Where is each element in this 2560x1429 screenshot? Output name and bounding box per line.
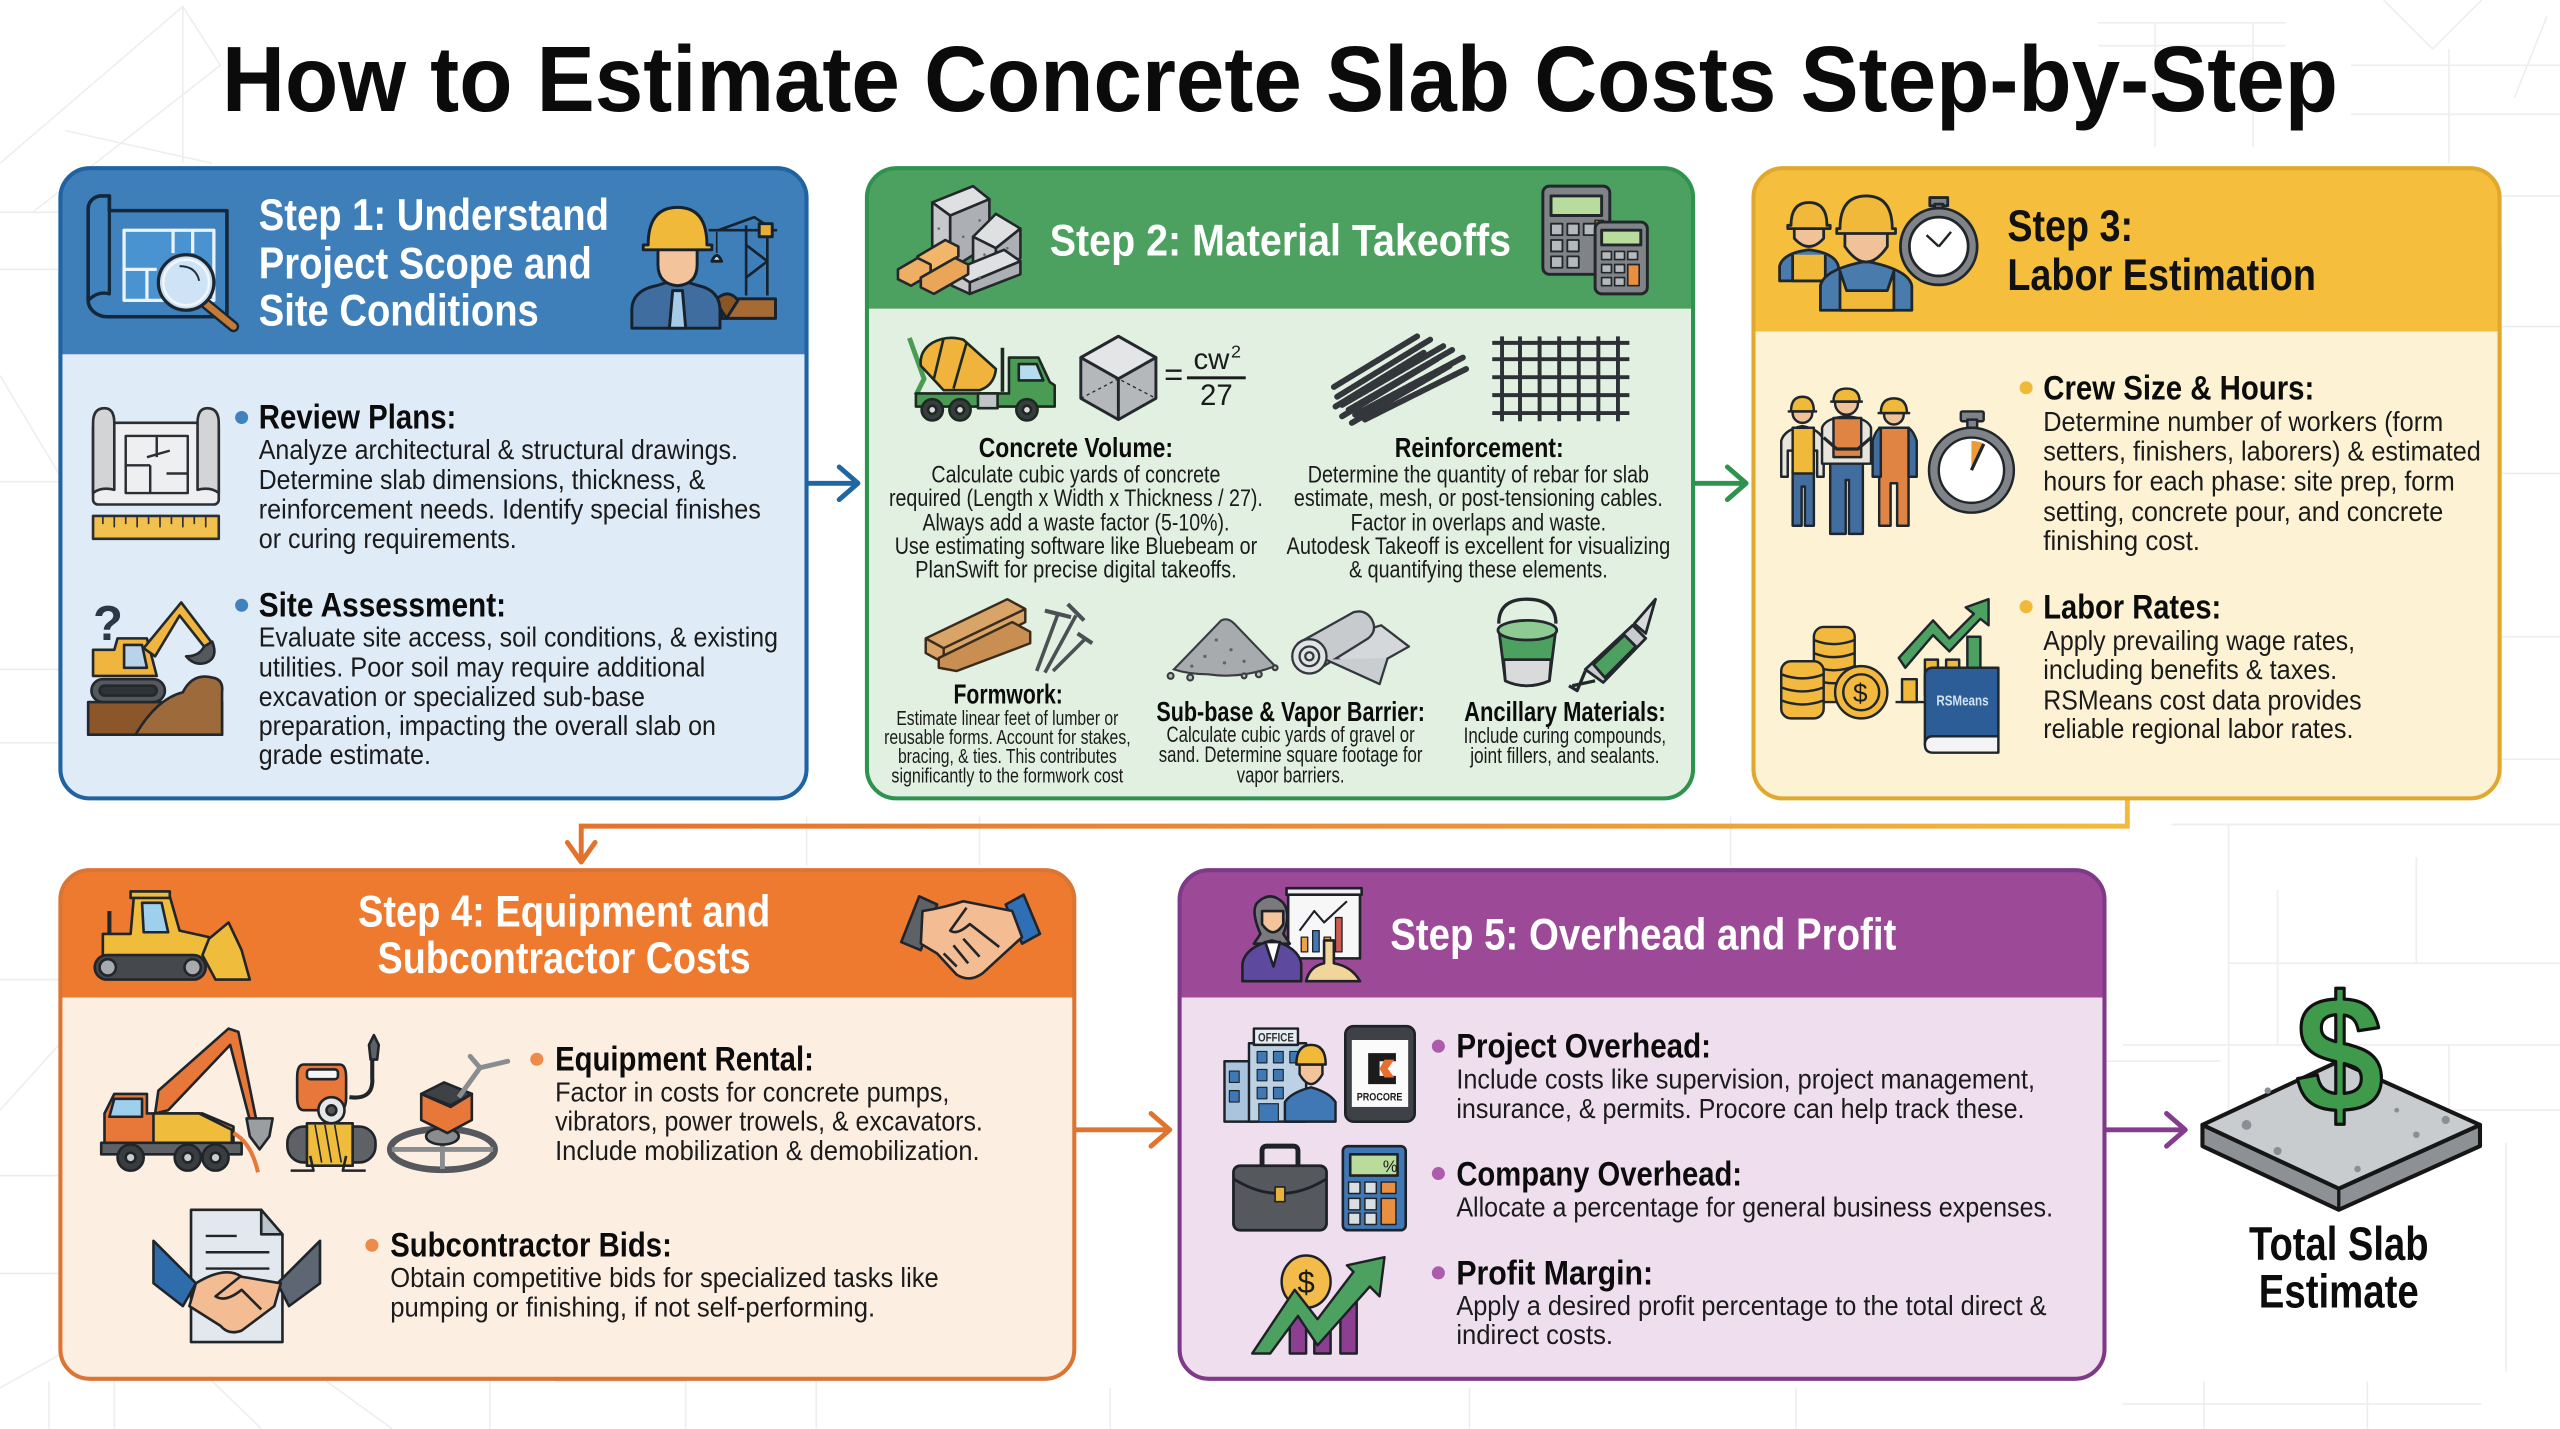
icon: curing bucket: [1498, 599, 1557, 686]
text: ancillary materials: [1464, 723, 1666, 768]
icon: bulldozer: [95, 891, 250, 980]
icon: lumber and nails: [926, 599, 1092, 673]
panel: step 3: [1753, 168, 2500, 798]
subheading: concrete volume: Concrete Volume:: [979, 432, 1173, 463]
icon: power trowel: [390, 1056, 508, 1170]
icon: vapor barrier roll: [1292, 611, 1409, 684]
text: review plans: or curing requirements.: [259, 523, 517, 554]
panel: step 1: [60, 168, 807, 798]
subheading: review plans: Review Plans:: [259, 399, 456, 437]
text: crew size and hours: hours for each phase: site prep, form: [2043, 466, 2455, 497]
text: sub-base and vapor barrier: sand. Determine square footage for: [1159, 742, 1422, 767]
heading: step 1: Site Conditions: [259, 287, 539, 336]
arrow: step 2 to step 3: [1693, 467, 1746, 500]
text: reinforcement: Determine the quantity of rebar for slab: [1308, 461, 1649, 488]
text: labor rates: [2043, 625, 2362, 744]
text: site assessment: [259, 622, 778, 770]
block: labor rates: [1781, 588, 2362, 753]
text: equipment rental: Include mobilization & demobilization.: [555, 1135, 980, 1166]
text: concrete volume: Use estimating software like Bluebeam or: [895, 533, 1257, 560]
block: reinforcement: [1287, 336, 1670, 583]
icon: profit chart: $: [1297, 1265, 1315, 1300]
text: reinforcement: estimate, mesh, or post-tensioning cables.: [1294, 485, 1663, 512]
heading: step 5: Step 5: Overhead and Profit: [1390, 910, 1897, 959]
icon: cube formula: 27: [1200, 379, 1233, 412]
title: How to Estimate Concrete Slab Costs Step-by-Step: [222, 27, 2338, 131]
text: profit margin: Apply a desired profit percentage to the total direct &: [1456, 1290, 2047, 1321]
text: crew size and hours: Determine number of workers (form: [2043, 406, 2443, 437]
icon: concrete blocks and lumber: [898, 186, 1020, 294]
bullet: [2020, 381, 2033, 394]
text: labor rates: RSMeans cost data provides: [2043, 684, 2362, 715]
icon: excavator on soil: ?: [93, 597, 123, 651]
icon: crew and stopwatch: [1781, 389, 2014, 534]
text: profit margin: [1456, 1290, 2047, 1350]
text: site assessment: preparation, impacting the overall slab on: [259, 710, 716, 741]
text: formwork: [884, 707, 1131, 787]
subheading: labor rates: Labor Rates:: [2043, 588, 2221, 626]
heading: step 4: Subcontractor Costs: [378, 934, 751, 983]
icon: excavator on soil: [88, 597, 222, 735]
text: equipment rental: vibrators, power trowels, & excavators.: [555, 1106, 983, 1137]
icon: concrete slab with dollar sign: $: [2296, 962, 2384, 1148]
text: project overhead: insurance, & permits. Procore can help track these.: [1456, 1093, 2024, 1124]
subheading: ancillary materials: Ancillary Materials:: [1464, 696, 1666, 727]
text: ancillary materials: Include curing compounds,: [1464, 723, 1666, 748]
bullet: [235, 599, 248, 612]
text: review plans: Determine slab dimensions, thickness, &: [259, 464, 706, 495]
icon: tablet with Procore: PROCORE: [1357, 1091, 1403, 1103]
block: subcontractor bids: [153, 1210, 939, 1342]
panel: step 4: [60, 870, 1074, 1379]
block: equipment rental: [101, 1029, 983, 1172]
text: site assessment: excavation or specialized sub-base: [259, 681, 645, 712]
block: ancillary materials: [1464, 599, 1666, 768]
text: profit margin: indirect costs.: [1456, 1319, 1613, 1350]
bullet: [1432, 1167, 1445, 1180]
heading: step 1: Project Scope and: [259, 239, 592, 288]
text: concrete volume: PlanSwift for precise digital takeoffs.: [915, 556, 1237, 583]
icon: excavator truck: [101, 1029, 273, 1172]
total slab estimate: [2202, 962, 2480, 1318]
icon: presenter with chart: [1242, 888, 1362, 981]
text: reinforcement: [1287, 461, 1670, 583]
text: sub-base and vapor barrier: Calculate cubic yards of gravel or: [1167, 722, 1415, 747]
icon: mixer truck: [909, 338, 1055, 420]
icon: tablet with Procore: [1345, 1026, 1415, 1122]
bullet: [365, 1239, 378, 1252]
block: company overhead: [1233, 1146, 2053, 1230]
text: subcontractor bids: [390, 1262, 939, 1323]
icon: calculators: [1543, 186, 1647, 294]
text: crew size and hours: setters, finishers, laborers) & estimated: [2043, 435, 2481, 466]
icon: cube formula: [1081, 336, 1246, 420]
text: reinforcement: & quantifying these elements.: [1349, 556, 1608, 583]
heading: step 3: Labor Estimation: [2007, 251, 2316, 300]
subheading: equipment rental: Equipment Rental:: [555, 1040, 814, 1078]
subheading: site assessment: Site Assessment:: [259, 586, 506, 624]
block: project overhead: [1224, 1026, 2035, 1124]
text: site assessment: utilities. Poor soil may require additional: [259, 652, 705, 683]
icon: coins, growth chart and RSMeans book: RSMeans: [1936, 693, 1989, 709]
label: total slab estimate: Total Slab: [2249, 1218, 2429, 1271]
subheading: reinforcement: Reinforcement:: [1395, 432, 1564, 463]
arrow: step 4 to step 5: [1076, 1113, 1170, 1146]
icon: cube formula: 2: [1231, 342, 1241, 362]
arrow: step 1 to step 2: [807, 467, 858, 500]
heading: step 2: Step 2: Material Takeoffs: [1050, 217, 1511, 266]
icon: percent calculator: [1343, 1146, 1406, 1230]
icon: gravel pile: [1168, 619, 1278, 680]
text: crew size and hours: [2043, 406, 2481, 556]
icon: workers and clock: [1780, 196, 1977, 310]
block: formwork: [884, 599, 1131, 787]
icon: coins, growth chart and RSMeans book: $: [1853, 678, 1868, 708]
text: equipment rental: Factor in costs for concrete pumps,: [555, 1076, 949, 1107]
icon: rebar bundle: [1334, 336, 1466, 423]
text: review plans: Analyze architectural & structural drawings.: [259, 434, 738, 465]
text: sub-base and vapor barrier: vapor barriers.: [1237, 762, 1344, 787]
text: concrete volume: required (Length x Width x Thickness / 27).: [889, 485, 1263, 512]
bullet: [1432, 1040, 1445, 1053]
bullet: [530, 1053, 543, 1066]
text: project overhead: [1456, 1064, 2035, 1124]
text: subcontractor bids: pumping or finishing, if not self-performing.: [390, 1292, 875, 1323]
icon: profit chart: [1252, 1256, 1384, 1353]
subheading: subcontractor bids: Subcontractor Bids:: [390, 1226, 672, 1264]
heading: step 3: Step 3:: [2007, 202, 2133, 251]
text: reinforcement: Factor in overlaps and waste.: [1351, 509, 1606, 536]
icon: concrete slab with dollar sign: [2202, 962, 2480, 1210]
text: reinforcement: Autodesk Takeoff is excellent for visualizing: [1287, 533, 1670, 560]
icon: handshake: [901, 895, 1040, 978]
text: subcontractor bids: Obtain competitive bids for specialized tasks like: [390, 1262, 939, 1293]
panel: step 2: [867, 168, 1693, 798]
subheading: formwork: Formwork:: [953, 679, 1063, 710]
icon: engineer and crane: [632, 207, 777, 328]
heading: step 4: [358, 888, 770, 983]
block: review plans: [93, 399, 761, 554]
text: labor rates: reliable regional labor rates.: [2043, 713, 2353, 744]
icon: office building with worker: OFFICE: [1258, 1031, 1294, 1045]
subheading: company overhead: Company Overhead:: [1456, 1156, 1742, 1194]
text: formwork: reusable forms. Account for stakes,: [884, 726, 1131, 749]
text: labor rates: Apply prevailing wage rates,: [2043, 625, 2355, 656]
icon: briefcase: [1233, 1146, 1327, 1230]
subheading: project overhead: Project Overhead:: [1456, 1028, 1711, 1066]
text: concrete volume: Calculate cubic yards of concrete: [931, 461, 1220, 488]
subheading: sub-base and vapor barrier: Sub-base & Vapor Barrier:: [1156, 696, 1425, 727]
text: company overhead: Allocate a percentage for general business expenses.: [1456, 1192, 2053, 1223]
block: profit margin: [1252, 1255, 2047, 1353]
text: review plans: reinforcement needs. Identify special finishes: [259, 493, 761, 524]
heading: step 4: Step 4: Equipment and: [358, 888, 770, 937]
block: sub-base and vapor barrier: [1156, 611, 1425, 787]
text: crew size and hours: setting, concrete pour, and concrete: [2043, 496, 2443, 527]
heading: step 3: [2007, 202, 2316, 300]
icon: coins, growth chart and RSMeans book: [1781, 599, 1998, 753]
text: concrete volume: Always add a waste factor (5-10%).: [922, 509, 1229, 536]
icon: cube formula: =: [1164, 355, 1183, 392]
icon: caulk tube: [1569, 599, 1656, 691]
text: site assessment: Evaluate site access, soil conditions, & existing: [259, 622, 778, 653]
text: concrete volume: [889, 461, 1263, 583]
arrow: step 3 to step 4: [567, 798, 2127, 862]
text: formwork: significantly to the formwork cost: [891, 764, 1123, 787]
text: equipment rental: [555, 1076, 983, 1166]
text: labor rates: including benefits & taxes.: [2043, 654, 2337, 685]
subheading: profit margin: Profit Margin:: [1456, 1255, 1653, 1293]
icon: wire mesh: [1492, 336, 1629, 421]
text: crew size and hours: finishing cost.: [2043, 525, 2200, 556]
icon: contract and handshake: [153, 1210, 320, 1342]
bullet: [2020, 600, 2033, 613]
icon: concrete vibrator: [287, 1035, 379, 1171]
icon: office building with worker: [1224, 1029, 1336, 1122]
block: crew size: [1781, 369, 2481, 556]
icon: rolled plans with ruler: [93, 408, 219, 539]
arrow: step 5 to total: [2104, 1113, 2185, 1146]
text: project overhead: Include costs like supervision, project management,: [1456, 1064, 2035, 1095]
icon: blueprint with magnifier: [88, 196, 233, 327]
subheading: crew size and hours: Crew Size & Hours:: [2043, 369, 2314, 407]
text: formwork: Estimate linear feet of lumber or: [896, 707, 1118, 730]
label: total slab estimate: [2249, 1218, 2429, 1318]
heading: step 1: [259, 191, 609, 336]
icon: percent calculator: %: [1383, 1158, 1397, 1176]
bullet: [1432, 1266, 1445, 1279]
icon: cube formula: cw: [1193, 343, 1230, 376]
block: concrete volume: [889, 336, 1263, 583]
label: total slab estimate: Estimate: [2259, 1265, 2419, 1318]
text: ancillary materials: joint fillers, and sealants.: [1469, 743, 1660, 768]
heading: step 1: Step 1: Understand: [259, 191, 609, 240]
text: formwork: bracing, & ties. This contributes: [898, 745, 1117, 768]
text: review plans: [259, 434, 761, 554]
text: sub-base and vapor barrier: [1159, 722, 1422, 787]
text: site assessment: grade estimate.: [259, 739, 431, 770]
block: site assessment: [88, 586, 778, 770]
bullet: [235, 411, 248, 424]
panel: step 5: [1180, 870, 2104, 1379]
